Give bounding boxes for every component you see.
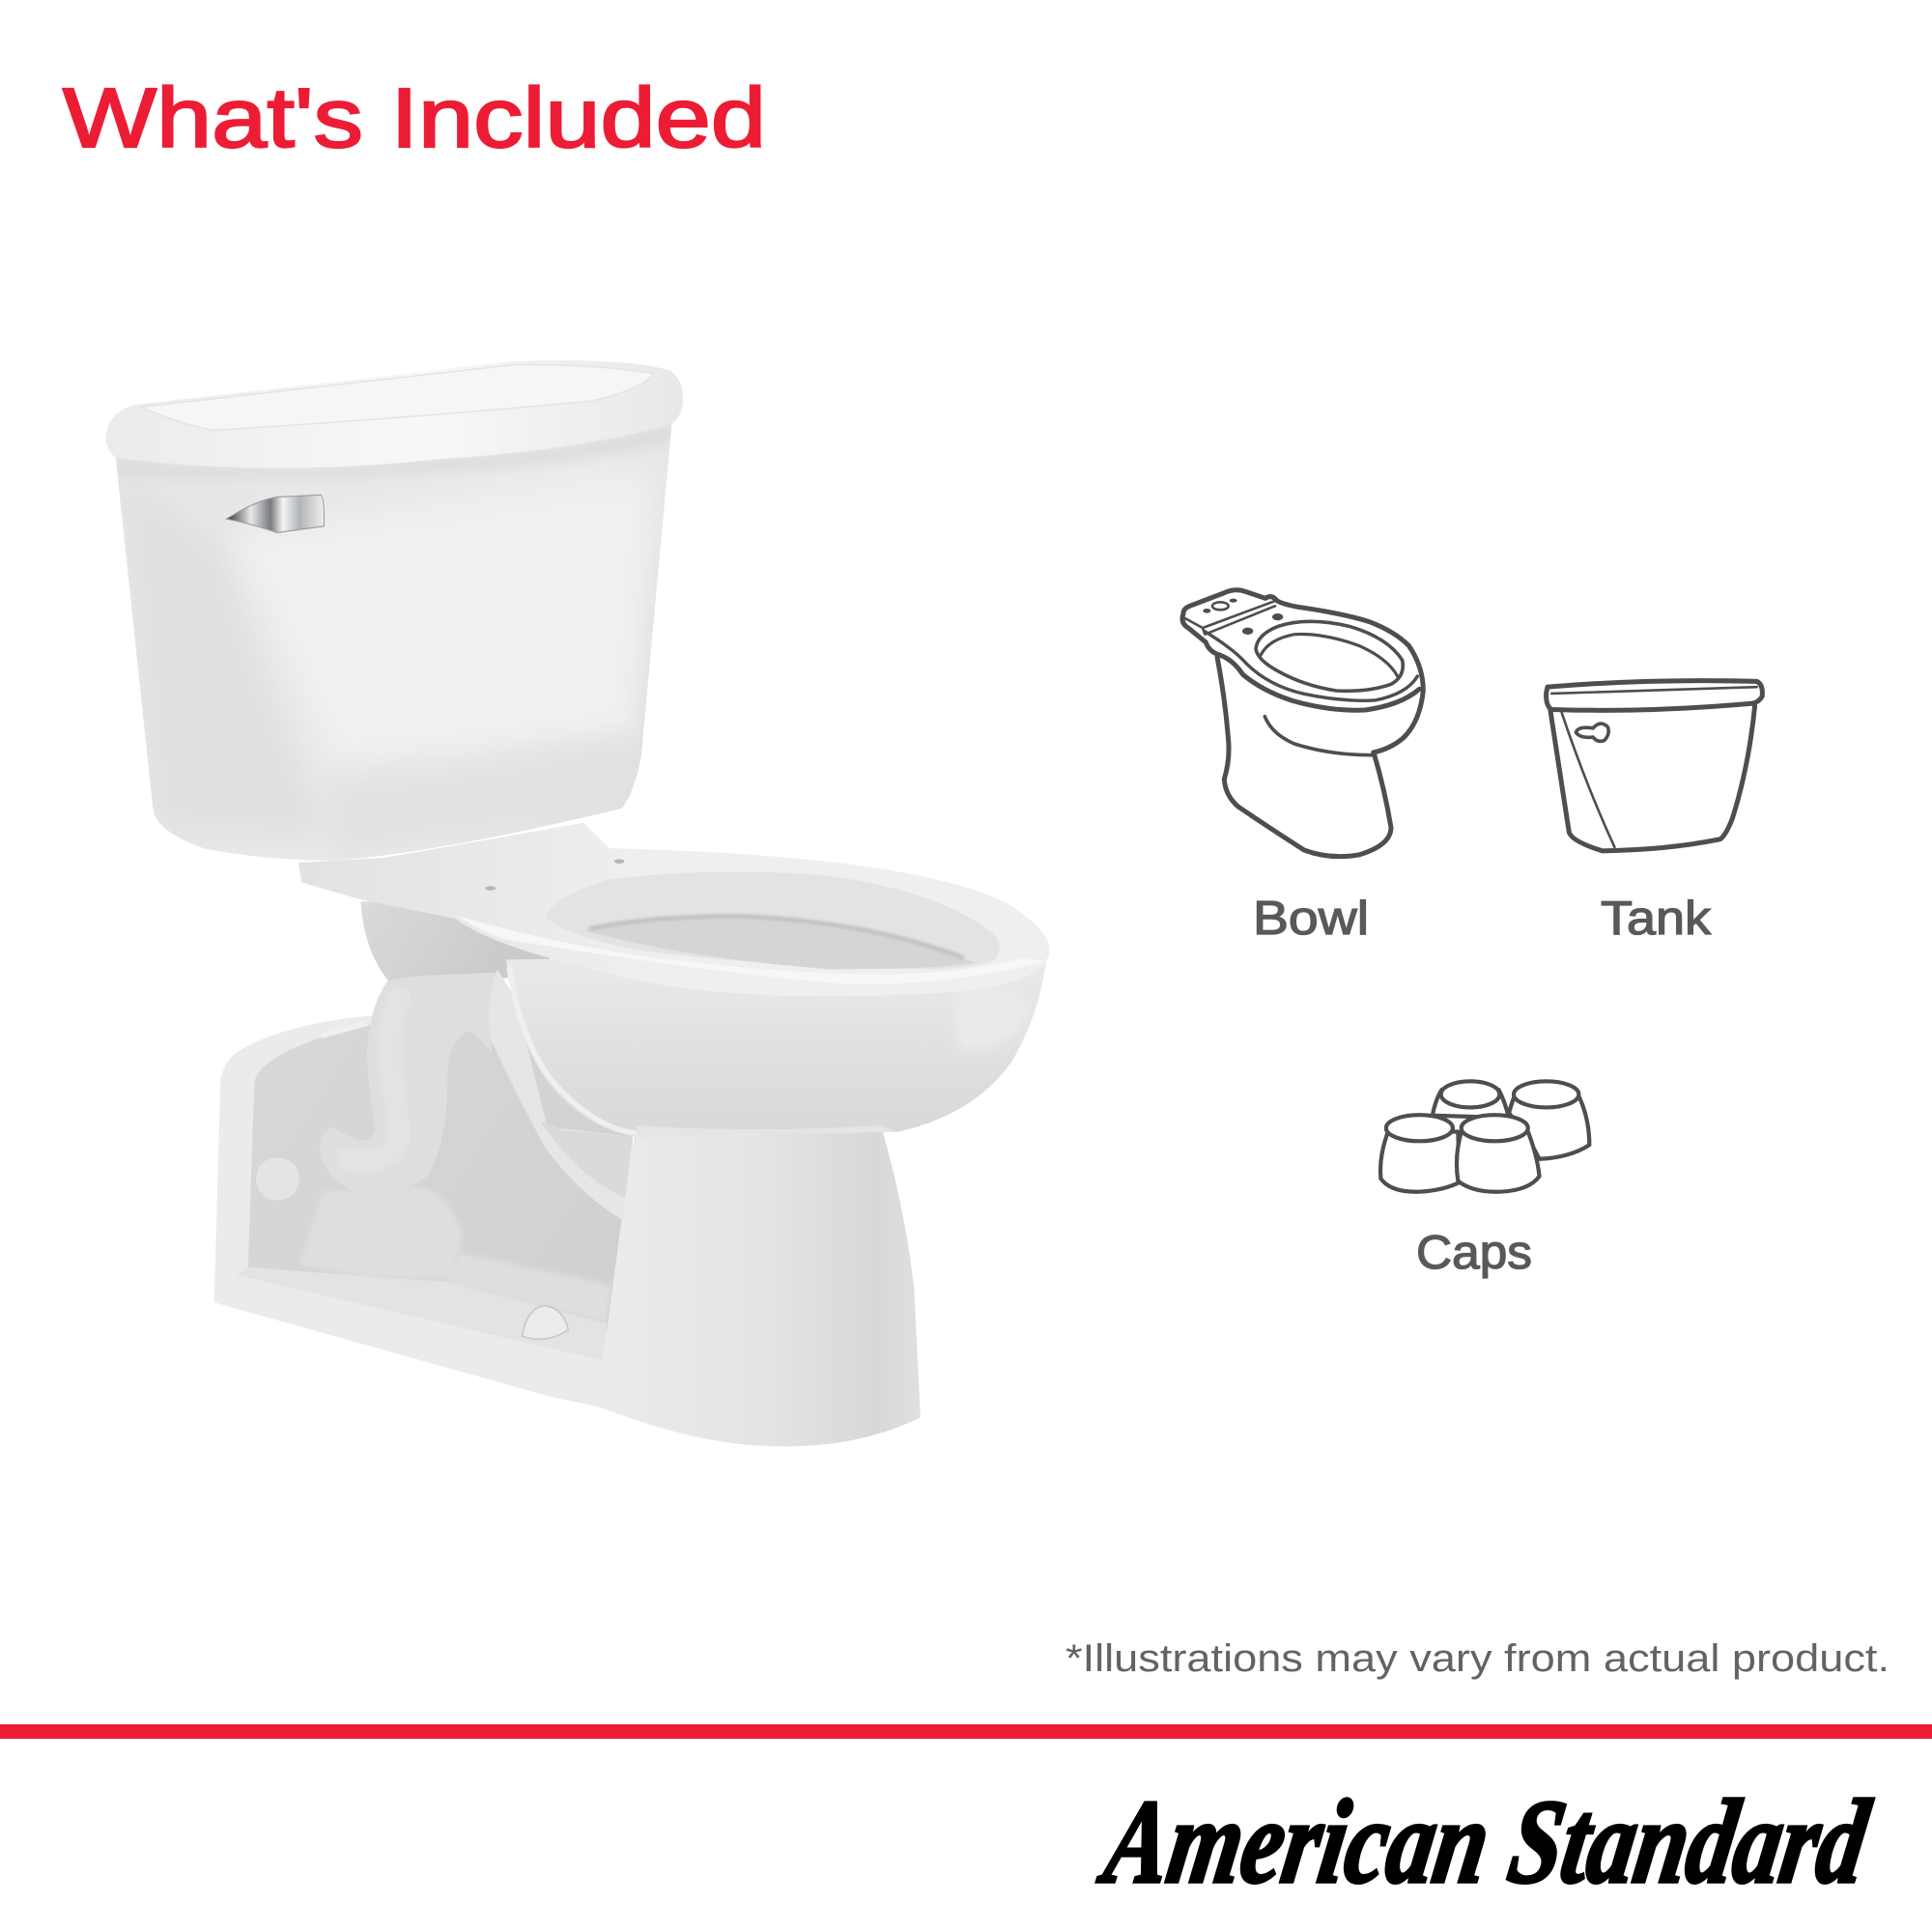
bowl left edge highlight xyxy=(510,969,637,1133)
rim bright band xyxy=(455,915,1045,984)
bowl soft highlight xyxy=(964,1024,1010,1045)
water surface xyxy=(584,916,975,969)
tank lid xyxy=(106,360,683,469)
cavity wall xyxy=(248,1024,633,1330)
trap base xyxy=(299,1186,611,1323)
tank body xyxy=(116,423,672,861)
icon: bowl xyxy=(1182,590,1423,857)
bowl lower band xyxy=(637,1125,898,1137)
icon: tank xyxy=(1547,681,1762,851)
bowl support band xyxy=(489,969,633,1220)
cavity floor xyxy=(237,1267,607,1360)
frame top highlight xyxy=(321,1021,369,1038)
trapway tube xyxy=(320,973,497,1193)
neck xyxy=(360,901,554,980)
inner bowl wall xyxy=(546,871,1000,969)
lid top panel xyxy=(141,364,654,430)
icon: caps xyxy=(1380,1081,1589,1192)
support shadow xyxy=(539,1121,633,1198)
flush handle xyxy=(227,495,324,532)
bowl opening xyxy=(455,871,1045,984)
pedestal xyxy=(590,1121,921,1446)
label: Caps: Caps xyxy=(1416,1227,1532,1279)
bowl body xyxy=(506,953,1047,1137)
tube highlight xyxy=(348,998,399,1161)
product photo: toilet xyxy=(106,360,1049,1446)
mounting holes xyxy=(486,859,624,891)
parts icons xyxy=(1182,590,1762,1192)
red divider bar xyxy=(0,1724,1932,1739)
label: Tank: Tank xyxy=(1601,893,1712,945)
title: What's Included xyxy=(63,71,766,165)
rear section: frame, cavity, trapway xyxy=(214,901,644,1417)
disclaimer: *Illustrations may vary from actual product. xyxy=(1065,1637,1889,1680)
label: Bowl: Bowl xyxy=(1253,893,1369,945)
rear frame and base xyxy=(214,1016,644,1417)
deck and rim xyxy=(298,823,1049,996)
tank and flush handle xyxy=(106,360,683,863)
water shadow edge xyxy=(589,916,964,958)
tank shading xyxy=(116,423,672,863)
bolt cap left xyxy=(256,1157,299,1201)
bolt cap right xyxy=(523,1306,568,1339)
